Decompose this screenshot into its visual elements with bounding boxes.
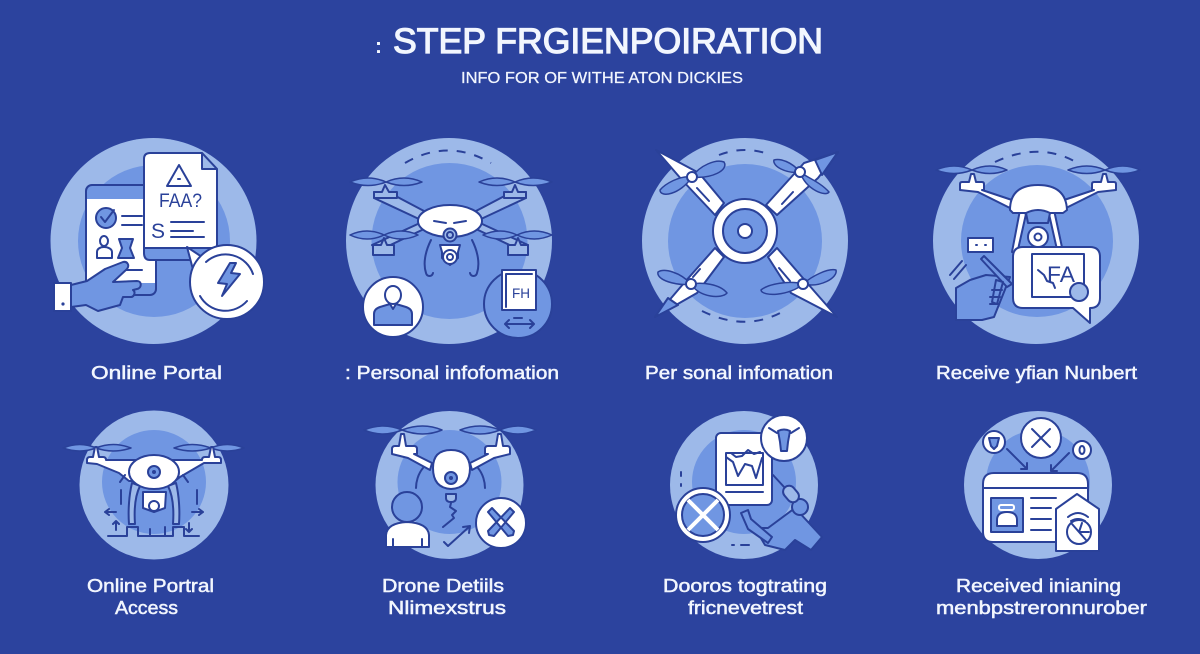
- icon: FA speech bubble: FA: [1047, 262, 1075, 287]
- icon backdrop circle: [50, 138, 256, 344]
- icon: crossed tools badge: [444, 498, 526, 548]
- label: [87, 576, 214, 618]
- icon: quadcopter: [350, 178, 552, 276]
- icon backdrop circle: [80, 410, 228, 560]
- title: STEP FRGIENPOIRATION: [393, 22, 823, 61]
- icon: hand with pen: [950, 238, 1012, 320]
- icon: pointing hand: [54, 262, 141, 311]
- icon: FAA document: [144, 153, 217, 260]
- dashed flight arc: [995, 152, 1074, 162]
- icon: FH document badge: [484, 270, 552, 338]
- label: [663, 576, 827, 618]
- label: fricnevetrest: [688, 598, 803, 618]
- icon: house tag with clock: [1056, 494, 1099, 551]
- icon backdrop circle: [670, 411, 818, 559]
- icon: drone: [364, 426, 536, 527]
- icon backdrop circle: [346, 138, 552, 344]
- icon backdrop circle: [376, 411, 524, 559]
- icon: person badge: [363, 277, 423, 337]
- icon backdrop circle: [642, 138, 848, 344]
- icon: front drone: [63, 444, 244, 524]
- label: Online Portal: [91, 363, 222, 383]
- label: Receive yfian Nunbert: [936, 363, 1137, 383]
- panel: doors integrating: [663, 411, 827, 618]
- label: Per sonal infomation: [645, 363, 833, 383]
- label: Drone Detiils: [382, 576, 504, 596]
- panel: received number: [936, 411, 1147, 618]
- icon: cross badge: [676, 472, 749, 545]
- icon: ID card: [983, 473, 1088, 542]
- icon: drone: [936, 166, 1140, 254]
- icon: hand with brush: [741, 483, 822, 550]
- subtitle: INFO FOR OF WITHE ATON DICKIES: [461, 70, 743, 87]
- icon: FA speech bubble: [1013, 247, 1100, 323]
- panel: online portal access: [63, 410, 244, 618]
- panel: personal information drone: [345, 138, 559, 383]
- label: Dooros togtrating: [663, 576, 827, 596]
- label: Access: [115, 598, 178, 618]
- icon: chart document: [716, 433, 785, 505]
- icon: bulb badge: [761, 415, 807, 461]
- label: Nlimexstrus: [388, 598, 506, 618]
- icon backdrop circle: [964, 411, 1112, 559]
- icon: FAA document: FAA?: [159, 191, 202, 212]
- panel: drone top view: [642, 138, 848, 383]
- title: :: [375, 35, 382, 58]
- panel: receive number: [933, 138, 1140, 383]
- label: Received inianing: [956, 576, 1121, 596]
- icon backdrop circle: [933, 138, 1139, 344]
- icon: ground and motion arrows: [105, 509, 203, 536]
- dashed flight arcs: [702, 150, 782, 322]
- icon: FAA document: S: [151, 220, 165, 243]
- label: Online Portral: [87, 576, 214, 596]
- label: menbpstreronnurober: [936, 598, 1147, 618]
- label: [382, 576, 506, 618]
- icon: FH document badge: FH: [512, 285, 530, 301]
- panel: drone details: [364, 411, 536, 618]
- label: [936, 576, 1147, 618]
- icon: top-down quadcopter: [655, 150, 838, 317]
- dashed flight arc: [405, 150, 491, 163]
- icon: lightning speech bubble: [187, 245, 264, 319]
- icon: arrows and small badges: [983, 418, 1091, 471]
- icon: tablet form: [86, 185, 156, 295]
- icon: person: [386, 492, 429, 547]
- panel: online portal: [50, 138, 264, 383]
- label: : Personal infofomation: [345, 363, 559, 383]
